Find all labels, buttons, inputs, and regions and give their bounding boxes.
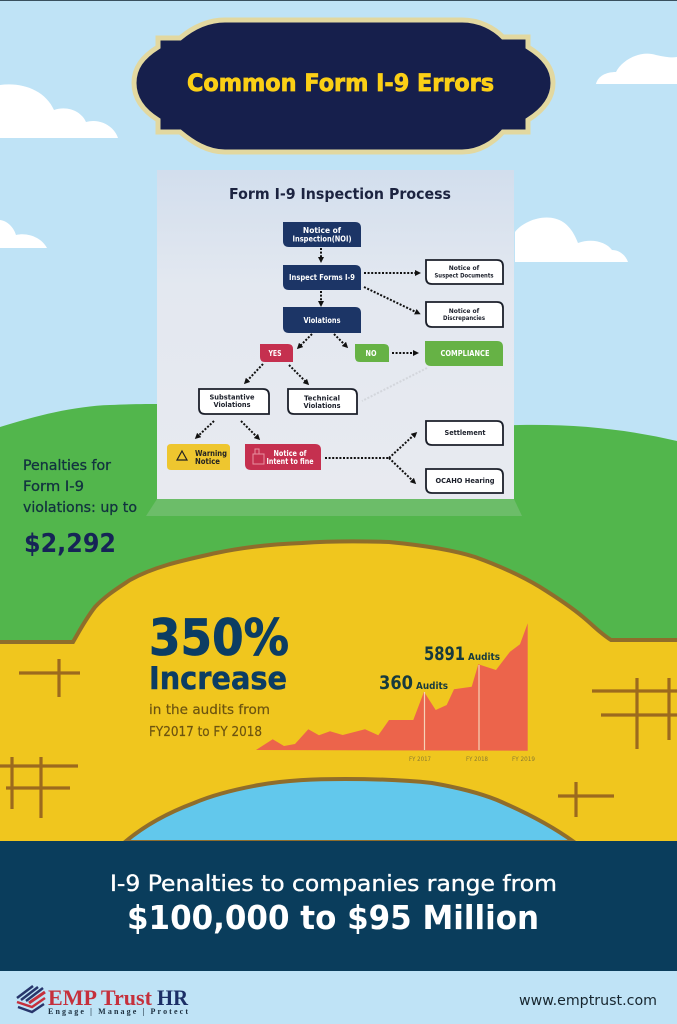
box: notice of suspect documents: Notice of <box>449 265 480 272</box>
panel heading: Form I-9 Inspection Process <box>229 185 451 203</box>
box: warning notice <box>167 444 230 470</box>
box: technical violations: Violations <box>304 402 340 410</box>
stat: 350% increase <box>149 609 289 740</box>
decorative fence marks <box>0 659 677 818</box>
band: penalties range: $100,000 to $95 Million <box>127 898 539 937</box>
box: warning notice: Notice <box>195 457 220 466</box>
box: substantive violations <box>199 389 269 414</box>
website url: www.emptrust.com <box>519 993 657 1009</box>
box: substantive violations: Violations <box>214 401 250 409</box>
area chart: audits: 360 <box>379 673 413 694</box>
green hill <box>0 404 677 660</box>
box: violations <box>283 307 361 333</box>
box: notice of intent to fine: Notice of <box>274 449 307 458</box>
box: no: NO <box>366 349 376 358</box>
box: compliance: COMPLIANCE <box>440 349 490 358</box>
box: technical violations: Technical <box>304 394 340 402</box>
box: ocaho hearing: OCAHO Hearing <box>436 477 494 485</box>
box: inspect forms <box>283 265 361 290</box>
box: notice of suspect documents <box>426 260 503 284</box>
box: notice of intent to fine: Intent to fine <box>266 457 314 466</box>
icon: documents <box>253 449 264 464</box>
box: ocaho hearing <box>426 469 503 493</box>
penalties text block: violations: up to <box>23 500 137 516</box>
area chart: audits: FY 2019 <box>512 756 535 763</box>
yellow ground with arch <box>0 541 677 845</box>
area chart: audits: Audits <box>468 652 500 663</box>
stat: 350% increase: FY2017 to FY 2018 <box>149 724 262 740</box>
band: penalties range <box>0 841 677 971</box>
title text: Common Form I-9 Errors <box>187 69 494 97</box>
panel stand <box>146 499 522 516</box>
footer logo <box>17 985 189 1016</box>
box: notice of intent to fine <box>245 444 321 470</box>
footer logo: EMP Trust <box>48 985 153 1010</box>
box: no <box>355 344 389 362</box>
box: substantive violations: Substantive <box>210 394 255 402</box>
box: compliance <box>425 341 503 366</box>
band: penalties range: I-9 Penalties to companies range from <box>110 872 557 897</box>
panel background <box>157 170 514 499</box>
cloud: middle right <box>515 217 628 262</box>
box: settlement <box>426 421 503 445</box>
area chart: audits <box>256 623 535 763</box>
cloud: top left <box>0 84 118 138</box>
box: warning notice: Warning <box>195 449 227 458</box>
box: technical violations <box>288 389 357 414</box>
cloud: top right <box>596 54 677 84</box>
box: notice of inspection: Notice of <box>303 226 342 235</box>
icon: warning triangle <box>177 451 187 460</box>
box: notice of discrepancies <box>426 302 503 327</box>
box: notice of discrepancies: Notice of <box>449 308 480 315</box>
area chart: audits: FY 2017 <box>409 756 431 763</box>
footer logo: HR <box>157 985 189 1010</box>
box: settlement: Settlement <box>444 429 486 437</box>
footer logo: Engage | Manage | Protect <box>48 1007 188 1016</box>
panel: inspection process flowchart <box>146 170 522 516</box>
stat: 350% increase: in the audits from <box>149 702 270 718</box>
box: yes: YES <box>268 349 282 358</box>
arrows <box>197 248 427 482</box>
box: violations: Violations <box>304 316 341 325</box>
area chart: audits: FY 2018 <box>466 756 488 763</box>
penalties text block: Form I-9 <box>23 479 84 495</box>
penalties text block <box>23 458 137 559</box>
box: notice of inspection <box>283 222 361 247</box>
box: notice of inspection: Inspection(NOI) <box>292 234 352 244</box>
box: notice of discrepancies: Discrepancies <box>443 315 485 322</box>
box: inspect forms: Inspect Forms I-9 <box>289 273 355 282</box>
stat: 350% increase: Increase <box>149 661 287 697</box>
stat: 350% increase: 350% <box>149 609 289 667</box>
icon: logo stripes <box>17 986 45 1012</box>
penalties text block: $2,292 <box>24 529 116 559</box>
box: yes <box>260 344 293 362</box>
blue pond <box>125 779 574 842</box>
area chart: audits: 5891 <box>424 644 465 665</box>
penalties text block: Penalties for <box>23 458 111 474</box>
title plaque <box>134 20 553 152</box>
cloud: middle left <box>0 220 47 248</box>
box: notice of suspect documents: Suspect Documents <box>434 272 494 280</box>
area chart: audits: Audits <box>416 681 448 692</box>
